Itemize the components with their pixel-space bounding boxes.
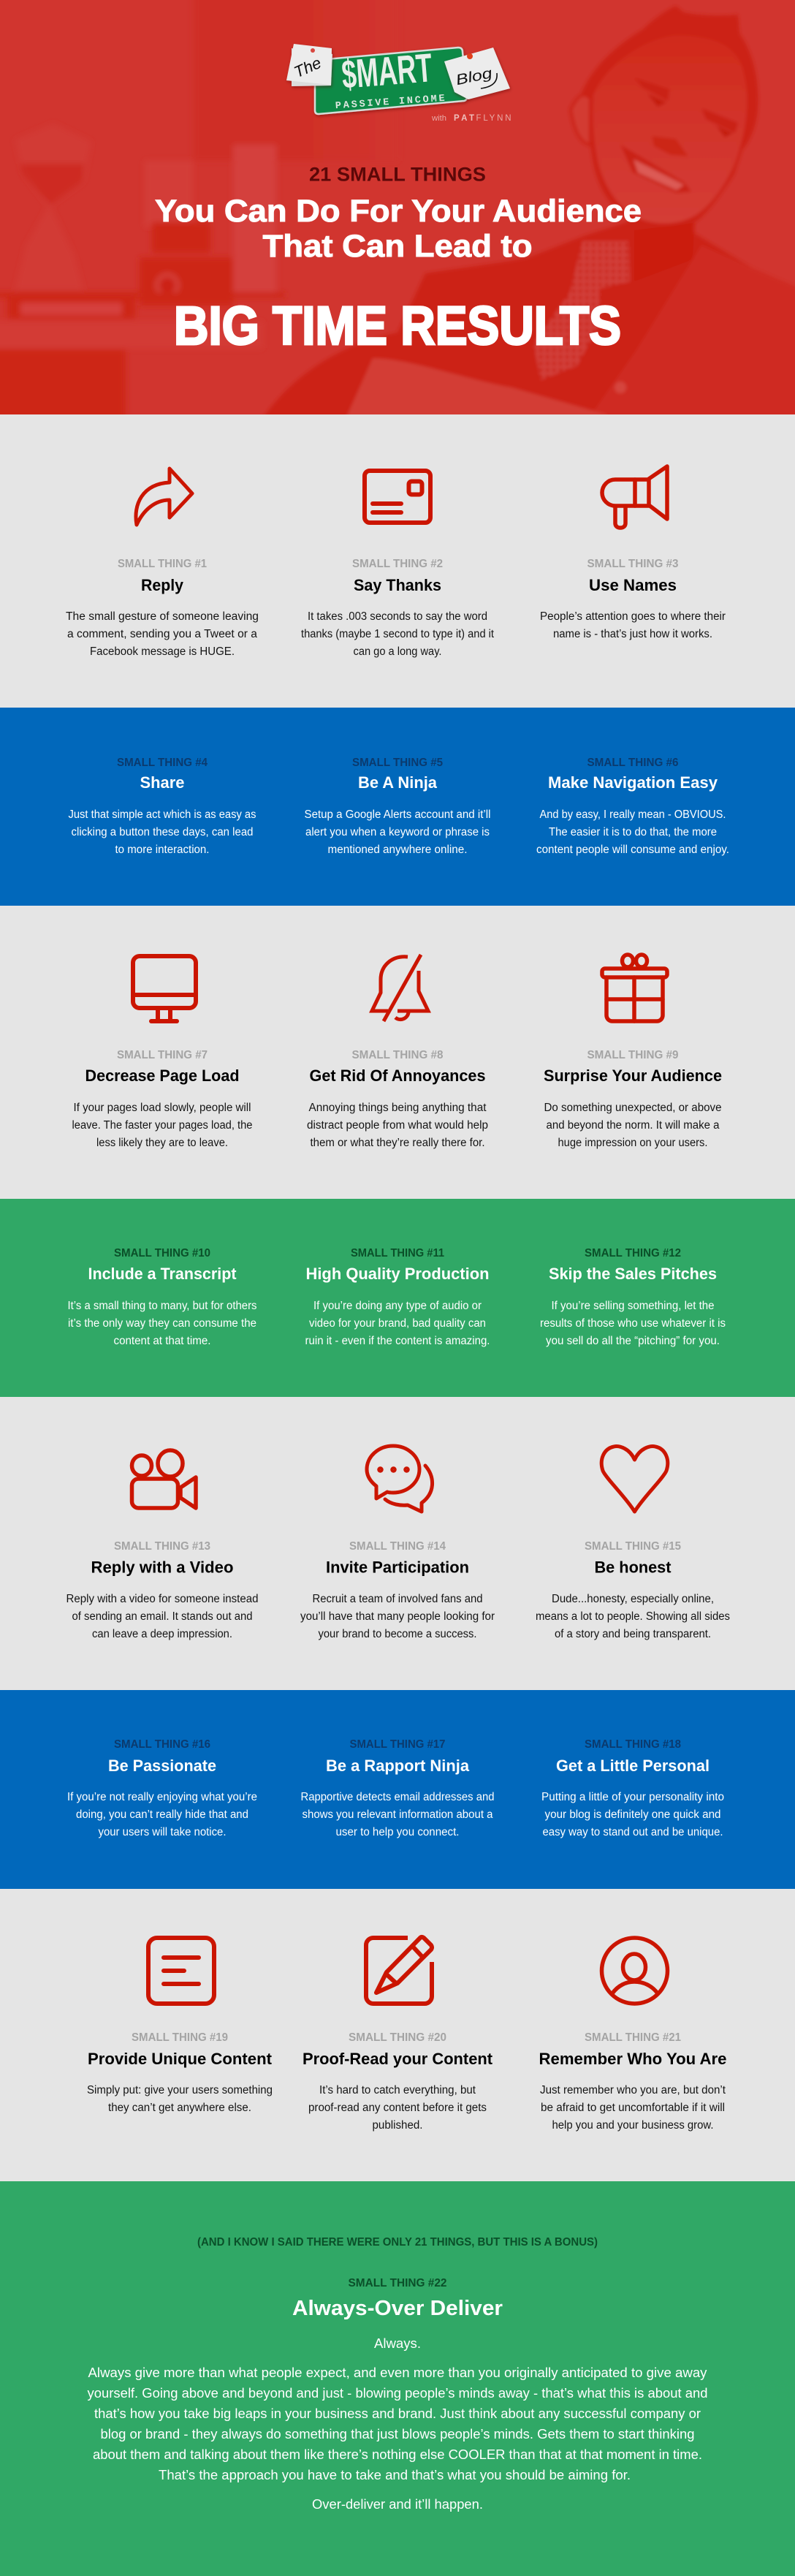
heading: Get a Little Personal — [556, 1757, 710, 1775]
card: thing 17 — [301, 1738, 494, 1838]
description: Dude...honesty, especially online, — [552, 1593, 714, 1605]
description: leave. The faster your pages load, the — [72, 1119, 253, 1132]
sticky note: The: The — [292, 53, 324, 81]
panel: things 1-3 — [0, 414, 795, 708]
icon: monitor — [133, 956, 196, 1021]
description: yourself. Going above and beyond and just - blowing people’s minds away - that’s what this is about and — [88, 2385, 707, 2401]
icon: video camera — [132, 1450, 196, 1508]
description — [67, 1300, 257, 1347]
description — [308, 2084, 487, 2132]
heading: Get Rid Of Annoyances — [310, 1067, 485, 1085]
description: mentioned anywhere online. — [327, 844, 468, 856]
description: it’s the only way they can consume the — [68, 1317, 256, 1330]
description: People’s attention goes to where their — [540, 610, 726, 623]
description — [540, 1300, 726, 1347]
label: SMALL THING #9 — [587, 1049, 679, 1061]
with Pat Flynn: with — [431, 114, 446, 123]
label: SMALL THING #8 — [352, 1049, 444, 1061]
card: thing 18 — [541, 1738, 724, 1838]
description: and beyond the norm. It will make a — [547, 1119, 720, 1132]
heading: Use Names — [589, 576, 677, 594]
card: thing 1 — [66, 469, 259, 658]
description: doing, you can’t really hide that and — [76, 1808, 248, 1821]
panel: bonus thing 22 — [0, 2181, 795, 2576]
description — [69, 808, 256, 856]
card: thing 5 — [304, 757, 491, 856]
description — [536, 808, 729, 856]
description: your users will take notice. — [98, 1826, 227, 1838]
label: SMALL THING #20 — [349, 2031, 446, 2044]
hero background photo (red duotone) — [0, 0, 795, 424]
icon: pencil and pad — [366, 1937, 432, 2004]
description: proof-read any content before it gets — [308, 2102, 487, 2114]
panel: things 19-21 — [0, 1889, 795, 2181]
icon: user profile — [602, 1938, 668, 2004]
description: they can’t get anywhere else. — [108, 2102, 251, 2114]
card: thing 8 — [307, 955, 488, 1149]
hero title — [155, 194, 642, 264]
hero title: You Can Do For Your Audience — [155, 194, 642, 229]
label: SMALL THING #12 — [585, 1247, 681, 1259]
heading: Reply with a Video — [91, 1558, 234, 1576]
card: thing 16 — [67, 1738, 257, 1838]
description: less likely they are to leave. — [96, 1137, 228, 1149]
panel: hero header — [0, 0, 795, 424]
description: can go a long way. — [354, 645, 441, 658]
icon: reply arrow — [136, 469, 192, 525]
label: SMALL THING #15 — [585, 1540, 681, 1553]
sticky note: The — [286, 44, 332, 86]
description — [301, 610, 495, 658]
description: Just remember who you are, but don’t — [540, 2084, 726, 2096]
description: Just that simple act which is as easy as — [69, 808, 256, 821]
heading: Skip the Sales Pitches — [549, 1265, 717, 1283]
description — [66, 610, 259, 658]
heading: Reply — [141, 576, 183, 594]
heading: Be Passionate — [108, 1757, 216, 1775]
bonus note: (AND I KNOW I SAID THERE WERE ONLY 21 THINGS, BUT THIS IS A BONUS) — [197, 2236, 598, 2249]
description: thanks (maybe 1 second to type it) and it — [301, 628, 495, 640]
card: thing 11 — [305, 1247, 490, 1347]
description: your brand to become a success. — [319, 1628, 476, 1640]
label: SMALL THING #18 — [585, 1738, 681, 1751]
description: you’ll have that many people looking for — [300, 1610, 495, 1623]
description: Reply with a video for someone instead — [66, 1593, 259, 1605]
label: SMALL THING #3 — [587, 558, 679, 570]
description: distract people from what would help — [307, 1119, 488, 1132]
panel: things 10-12 — [0, 1199, 795, 1397]
heading: Include a Transcript — [88, 1265, 237, 1283]
description: Over-deliver and it’ll happen. — [312, 2496, 483, 2512]
heading: Make Navigation Easy — [548, 773, 718, 792]
card: thing 13 — [66, 1450, 259, 1640]
heading: Always-Over Deliver — [292, 2297, 503, 2320]
description: be afraid to get uncomfortable if it will — [541, 2102, 725, 2114]
panel: things 7-9 — [0, 906, 795, 1199]
icon: megaphone — [602, 466, 667, 528]
description: that’s how you take big leaps in your business and brand. Just think about any successful company or — [94, 2406, 701, 2421]
icon: muted bell — [372, 955, 428, 1021]
card: thing 19 — [87, 1938, 273, 2114]
heading: Be a Rapport Ninja — [326, 1757, 469, 1775]
label: SMALL THING #11 — [351, 1247, 444, 1259]
description: The small gesture of someone leaving — [66, 610, 259, 623]
description: Always. — [374, 2336, 421, 2351]
description — [307, 1102, 488, 1149]
card: thing 3 — [540, 466, 726, 640]
with Pat Flynn: PAT — [454, 114, 474, 123]
description: blog or brand - they always do something that just blows people’s minds. Gets them to start thinking — [101, 2426, 694, 2441]
card: thing 6 — [536, 757, 729, 856]
description: you sell do all the “pitching” for you. — [546, 1335, 720, 1347]
icon: gift box — [602, 955, 667, 1021]
icon: chat bubbles — [367, 1446, 433, 1512]
label: SMALL THING #22 — [348, 2277, 447, 2289]
description: content at that time. — [114, 1335, 210, 1347]
description: results of those who use whatever it is — [540, 1317, 726, 1330]
description: If you’re doing any type of audio or — [313, 1300, 482, 1312]
label: SMALL THING #10 — [114, 1247, 210, 1259]
sticky note: Blog: Blog — [454, 65, 493, 88]
heading: Share — [140, 773, 184, 792]
description: alert you when a keyword or phrase is — [305, 826, 490, 838]
description: a comment, sending you a Tweet or a — [67, 628, 257, 640]
sticky note: Blog — [444, 48, 510, 99]
icon: heart — [601, 1447, 668, 1512]
icon: document — [148, 1938, 214, 2004]
description: Always give more than what people expect, and even more than you originally anticipated to give away — [88, 2365, 707, 2380]
description: help you and your business grow. — [552, 2119, 713, 2132]
card: thing 9 — [544, 955, 722, 1149]
heading: Decrease Page Load — [85, 1067, 240, 1085]
description: Recruit a team of involved fans and — [313, 1593, 482, 1605]
description: means a lot to people. Showing all sides — [536, 1610, 730, 1623]
logo sign: PASSIVE INCOME — [335, 94, 445, 112]
label: SMALL THING #6 — [587, 757, 679, 769]
description: Do something unexpected, or above — [544, 1102, 722, 1114]
description: If your pages load slowly, people will — [73, 1102, 251, 1114]
description — [540, 2084, 726, 2132]
description — [305, 1300, 490, 1347]
card: thing 15 — [536, 1447, 730, 1640]
description — [544, 1102, 722, 1149]
description — [67, 1791, 257, 1838]
heading: Say Thanks — [354, 576, 441, 594]
label: SMALL THING #1 — [118, 558, 207, 570]
heading: Remember Who You Are — [539, 2050, 726, 2068]
description — [541, 1791, 724, 1838]
description: can leave a deep impression. — [92, 1628, 232, 1640]
description: about them and talking about them like there’s nothing else COOLER than that at that moment in time. — [93, 2447, 702, 2462]
description — [88, 2336, 707, 2512]
description: It takes .003 seconds to say the word — [308, 610, 487, 623]
heading: Invite Participation — [326, 1558, 469, 1576]
label: SMALL THING #16 — [114, 1738, 210, 1751]
description: Simply put: give your users something — [87, 2084, 273, 2096]
description — [87, 2084, 273, 2114]
description: of a story and being transparent. — [555, 1628, 711, 1640]
description: It’s hard to catch everything, but — [319, 2084, 476, 2096]
description — [300, 1593, 495, 1640]
description — [540, 610, 726, 640]
label: SMALL THING #14 — [349, 1540, 446, 1553]
heading: Be honest — [595, 1558, 672, 1576]
description: Rapportive detects email addresses and — [301, 1791, 494, 1803]
logo sign: $MART — [340, 45, 434, 97]
description: huge impression on your users. — [558, 1137, 707, 1149]
description: video for your brand, bad quality can — [309, 1317, 486, 1330]
card: thing 10 — [67, 1247, 257, 1347]
description: user to help you connect. — [336, 1826, 459, 1838]
description: It’s a small thing to many, but for others — [67, 1300, 257, 1312]
description: name is - that’s just how it works. — [553, 628, 712, 640]
panel: things 16-18 — [0, 1690, 795, 1889]
card: thing 4 — [69, 757, 256, 856]
description: to more interaction. — [115, 844, 209, 856]
icon: postcard — [365, 471, 430, 523]
description — [301, 1791, 494, 1838]
hero eyebrow: 21 SMALL THINGS — [309, 164, 486, 186]
description: And by easy, I really mean - OBVIOUS. — [539, 808, 726, 821]
card: thing 2 — [301, 471, 495, 658]
label: SMALL THING #13 — [114, 1540, 210, 1553]
label: SMALL THING #4 — [117, 757, 208, 769]
hero title: That Can Lead to — [263, 229, 532, 264]
panel: things 13-15 — [0, 1397, 795, 1690]
heading: Proof-Read your Content — [303, 2050, 492, 2068]
description: content people will consume and enjoy. — [536, 844, 729, 856]
description: of sending an email. It stands out and — [72, 1610, 253, 1623]
description — [304, 808, 491, 856]
description — [72, 1102, 253, 1149]
label: SMALL THING #21 — [585, 2031, 681, 2044]
description: Putting a little of your personality into — [541, 1791, 724, 1803]
description — [66, 1593, 259, 1640]
description: ruin it - even if the content is amazing. — [305, 1335, 490, 1347]
heading: High Quality Production — [305, 1265, 490, 1283]
description: easy way to stand out and be unique. — [542, 1826, 723, 1838]
card: thing 14 — [300, 1446, 495, 1640]
description: The easier it is to do that, the more — [549, 826, 717, 838]
card: thing 20 — [303, 1937, 492, 2132]
description — [536, 1593, 730, 1640]
description: clicking a button these days, can lead — [72, 826, 253, 838]
logo: The Smart Passive Income Blog — [286, 44, 511, 123]
description: If you’re not really enjoying what you’re — [67, 1791, 257, 1803]
panel: things 4-6 — [0, 708, 795, 906]
label: SMALL THING #17 — [349, 1738, 446, 1751]
heading: Be A Ninja — [358, 773, 437, 792]
description: If you’re selling something, let the — [551, 1300, 715, 1312]
description: shows you relevant information about a — [303, 1808, 493, 1821]
with Pat Flynn — [431, 114, 511, 123]
hero big headline: BIG TIME RESULTS — [174, 295, 621, 356]
card: thing 12 — [540, 1247, 726, 1347]
description: Annoying things being anything that — [308, 1102, 487, 1114]
label: SMALL THING #7 — [117, 1049, 208, 1061]
heading: Provide Unique Content — [88, 2050, 272, 2068]
label: SMALL THING #2 — [352, 558, 443, 570]
description: your blog is definitely one quick and — [545, 1808, 720, 1821]
card: thing 21 — [539, 1938, 726, 2132]
description: Setup a Google Alerts account and it’ll — [304, 808, 491, 821]
heading: Surprise Your Audience — [544, 1067, 722, 1085]
description: Facebook message is HUGE. — [90, 645, 235, 658]
with Pat Flynn: FLYNN — [476, 114, 511, 123]
logo sign — [315, 45, 467, 114]
description: That’s the approach you have to take and that’s what you should be aiming for. — [159, 2467, 631, 2482]
label: SMALL THING #5 — [352, 757, 443, 769]
card: thing 7 — [72, 956, 253, 1149]
description: them or what they’re really there for. — [310, 1137, 485, 1149]
label: SMALL THING #19 — [132, 2031, 228, 2044]
description: published. — [373, 2119, 422, 2132]
